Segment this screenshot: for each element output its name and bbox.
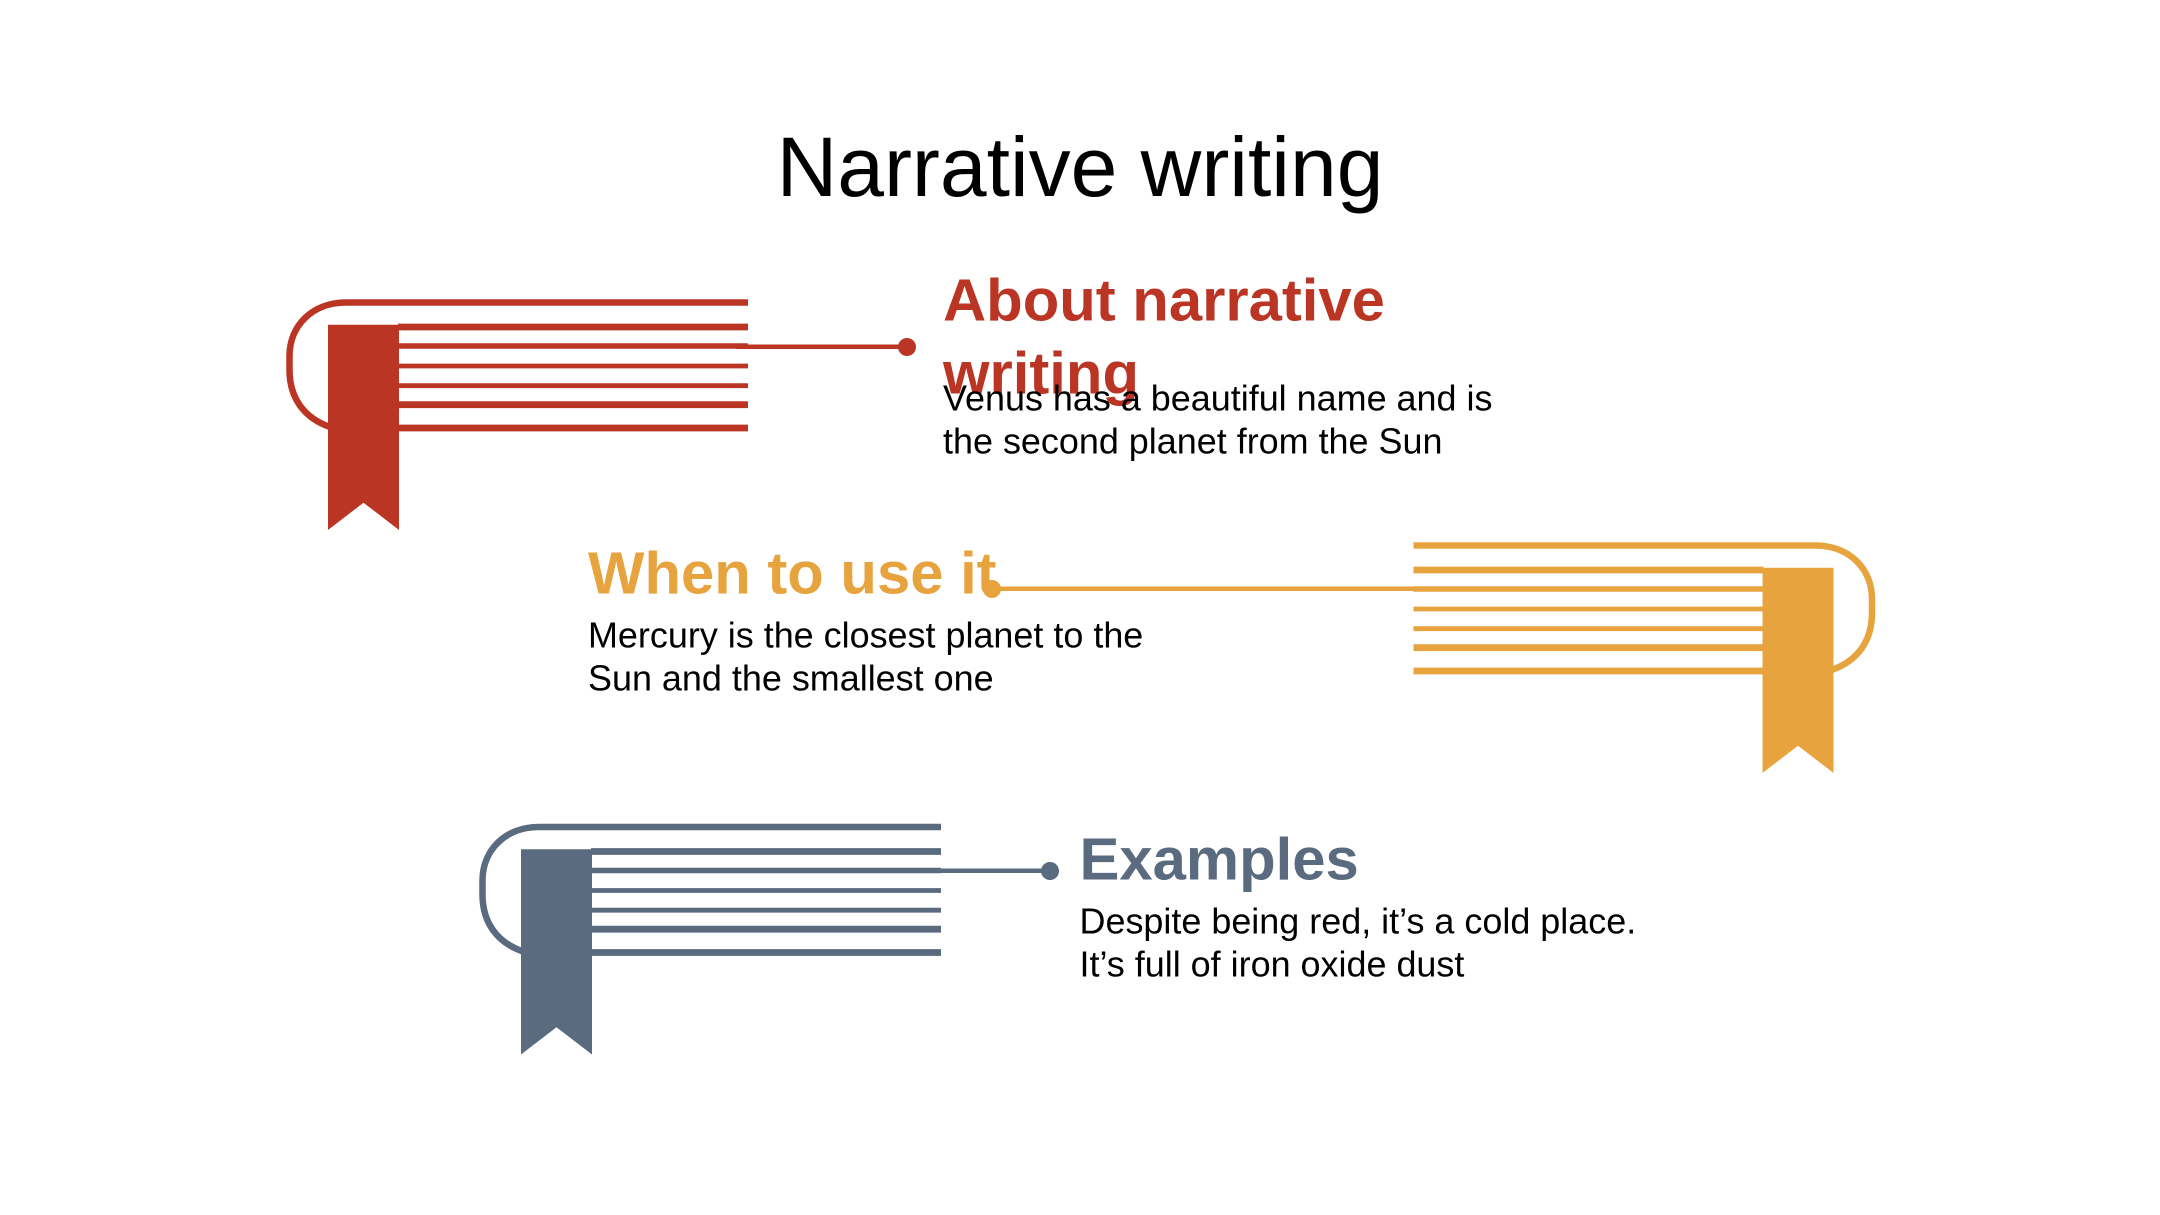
- panel: examples: [482, 826, 1636, 1054]
- heading: When to use it: [588, 540, 997, 606]
- body text: Sun and the smallest one: [588, 658, 994, 698]
- body text: Despite being red, it’s a cold place.: [1080, 900, 1636, 942]
- connector line with dot: [983, 580, 1414, 598]
- icon: slate book with bookmark: [482, 827, 941, 1054]
- heading: Examples: [1080, 826, 1359, 892]
- connector line with dot: [736, 338, 916, 356]
- heading: About narrative: [943, 266, 1385, 334]
- title: Narrative writing: [777, 120, 1383, 214]
- panel: when to use it: [588, 540, 1872, 773]
- body text: the second planet from the Sun: [943, 420, 1442, 462]
- body text: It’s full of iron oxide dust: [1080, 944, 1464, 984]
- icon: red book with bookmark: [290, 302, 748, 530]
- panel: about narrative writing: [290, 266, 1492, 530]
- body text: Mercury is the closest planet to the: [588, 614, 1143, 656]
- heading: writing: [942, 340, 1139, 406]
- connector line with dot: [930, 862, 1059, 880]
- body text: Venus has a beautiful name and is: [943, 378, 1492, 418]
- icon: yellow book with bookmark: [1414, 546, 1872, 773]
